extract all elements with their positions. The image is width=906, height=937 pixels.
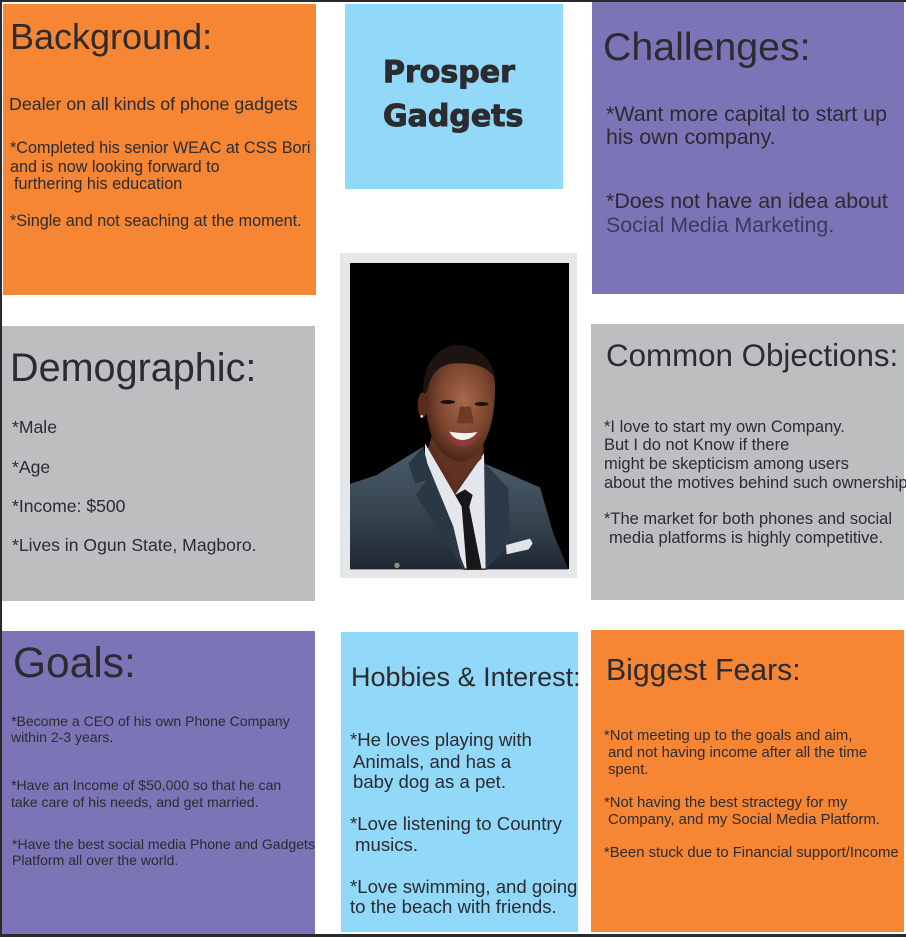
text block: fears details: *Not meeting up to the goals and aim, — [604, 728, 852, 744]
title: Prosper — [383, 55, 515, 90]
heading: challenges: Challenges: — [603, 25, 811, 69]
text block: hobbies details — [350, 729, 577, 917]
text block: goals details: *Become a CEO of his own Phone Company — [11, 713, 290, 729]
heading: demographic: Demographic: — [10, 346, 256, 390]
text block: fears details: Company, and my Social Media Platform. — [608, 812, 880, 828]
heading: background: Background: — [10, 16, 212, 57]
tie — [455, 489, 482, 569]
text block: background details: furthering his education — [14, 175, 182, 193]
text block: goals details: *Have an Income of $50,000 so that he can — [11, 777, 281, 793]
panel: demographic — [2, 326, 315, 601]
text block: background details: *Single and not seaching at the moment. — [10, 212, 302, 230]
text block: hobbies details: *He loves playing with — [350, 729, 532, 750]
hair — [423, 345, 495, 392]
text block: goals details: take care of his needs, and get married. — [11, 794, 259, 810]
panel: title — [345, 4, 563, 189]
text block: fears details — [604, 728, 899, 861]
text block: demographic details — [12, 417, 256, 555]
text block: demographic details: *Income: $500 — [12, 496, 126, 516]
text block: hobbies details: *Love swimming, and going — [350, 876, 577, 897]
text block: background details — [9, 94, 310, 230]
suit — [350, 447, 463, 569]
text block: objections details: media platforms is highly competitive. — [609, 529, 883, 547]
text block: objections details: *The market for both phones and social — [604, 510, 892, 528]
portrait photo — [340, 253, 577, 578]
text block: fears details: spent. — [608, 762, 648, 778]
text block: goals details: Platform all over the world. — [12, 852, 178, 868]
text block: challenges details: Social Media Marketing. — [606, 213, 834, 237]
text block: objections details: *I love to start my own Company. — [604, 418, 845, 436]
text block: hobbies details: baby dog as a pet. — [353, 771, 506, 792]
panel: background — [3, 4, 316, 295]
panel: goals — [2, 631, 315, 934]
text block: hobbies details: musics. — [355, 834, 418, 855]
text block: demographic details: *Lives in Ogun State, Magboro. — [12, 535, 256, 555]
face — [425, 357, 495, 462]
eyes and brows — [440, 400, 455, 404]
text block: challenges details: *Does not have an idea about — [606, 189, 888, 213]
text block: fears details: *Been stuck due to Financial support/Income — [604, 845, 899, 861]
panel: challenges — [592, 2, 904, 294]
text block: hobbies details: to the beach with friends. — [350, 896, 557, 917]
text block: demographic details: *Male — [12, 417, 57, 437]
title — [383, 55, 523, 134]
text block: hobbies details: *Love listening to Country — [350, 813, 563, 834]
text block: fears details: and not having income after all the time — [608, 745, 867, 761]
title: Gadgets — [383, 99, 523, 134]
pocket square — [506, 539, 533, 554]
text block: challenges details: *Want more capital to start up — [606, 102, 887, 126]
text block: objections details: But I do not Know if there — [604, 436, 789, 454]
text block: hobbies details: Animals, and has a — [353, 751, 512, 772]
ear — [418, 392, 428, 418]
panel: common objections — [591, 324, 906, 600]
text block: objections details — [604, 418, 906, 547]
text block: goals details — [10, 713, 315, 868]
mouth — [446, 430, 480, 447]
heading: hobbies and interest: Hobbies & Interest: — [351, 662, 581, 692]
text block: background details: *Completed his senior WEAC at CSS Bori — [10, 139, 310, 157]
text block: objections details: might be skepticism among users — [604, 455, 849, 473]
neck and shirt — [423, 437, 487, 570]
heading: biggest fears: Biggest Fears: — [606, 654, 801, 687]
text block: goals details: *Have the best social media Phone and Gadgets — [12, 836, 315, 852]
heading: goals: Goals: — [13, 640, 136, 687]
panel: biggest fears — [591, 630, 904, 932]
text block: fears details: *Not having the best stractegy for my — [604, 795, 848, 811]
text block: challenges details: his own company. — [606, 125, 776, 149]
panel: hobbies and interest — [341, 632, 581, 932]
heading: common objections: Common Objections: — [606, 338, 898, 373]
text block: objections details: about the motives behind such ownership — [604, 474, 906, 492]
text block: goals details: within 2-3 years. — [10, 729, 113, 745]
text block: background details: Dealer on all kinds of phone gadgets — [9, 94, 298, 114]
text block: demographic details: *Age — [12, 457, 50, 477]
text block: challenges details — [606, 102, 888, 237]
text block: background details: and is now looking forward to — [10, 158, 220, 176]
